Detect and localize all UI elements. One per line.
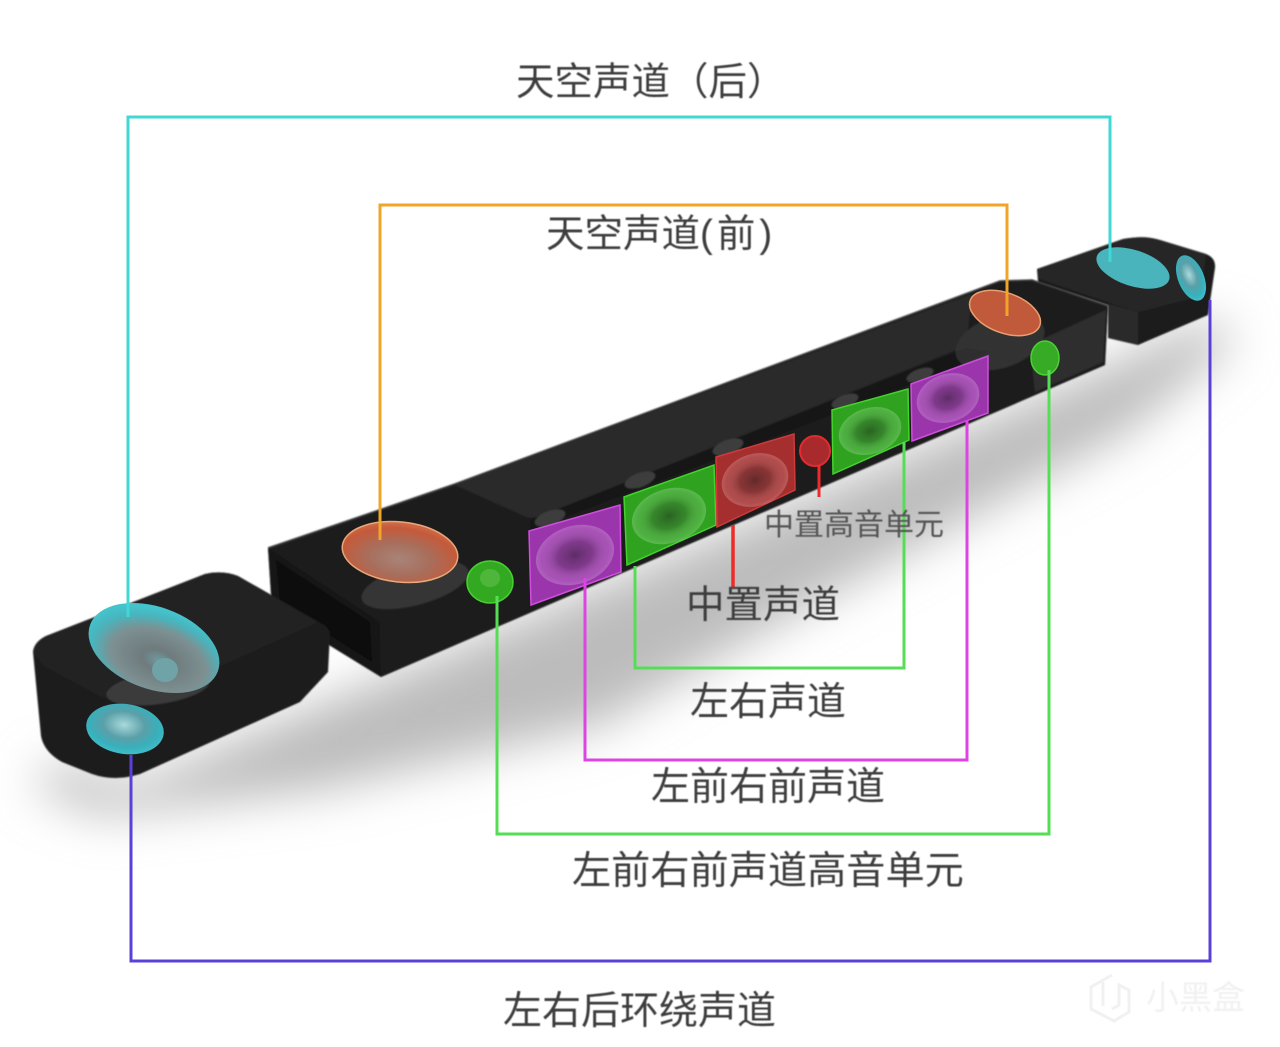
speakers: left/right channel (green) [624,389,909,565]
speakers: front tweeters (green) [467,341,1059,603]
soundbar main body [268,280,1108,677]
label: sky front: 天空声道(前) [546,213,776,256]
watermark [1091,975,1245,1021]
label: front left/right: 左前右前声道 [651,766,885,809]
floor shadow [30,320,1235,815]
label: center tweeter: 中置高音单元 [764,509,944,542]
label: left/right channel: 左右声道 [690,681,846,724]
callout line: rear surround [131,300,1210,961]
callout line: left/right channel [635,442,904,668]
speakers: sky channel rear (cyan) [76,239,1212,759]
right rear surround module [1037,237,1215,345]
callout line: front tweeters [497,370,1049,834]
left rear surround module [33,572,330,778]
callout line: sky rear [128,117,1110,617]
label: center channel: 中置声道 [686,584,840,627]
speakers: front left/right (purple) [528,356,988,605]
callout line: center channel [731,525,735,587]
speakers: sky channel front (orange) [339,282,1047,588]
label: rear surround: 左右后环绕声道 [503,990,776,1033]
speakers: center channel and tweeter (red) [715,434,830,527]
callout line: center tweeter [818,465,820,497]
callout line: sky front [380,205,1007,540]
label: sky rear: 天空声道（后） [516,61,786,104]
callout line: front left/right [585,420,967,760]
label: front tweeters: 左前右前声道高音单元 [572,850,964,893]
watermark: 小黑盒 [1146,979,1245,1016]
